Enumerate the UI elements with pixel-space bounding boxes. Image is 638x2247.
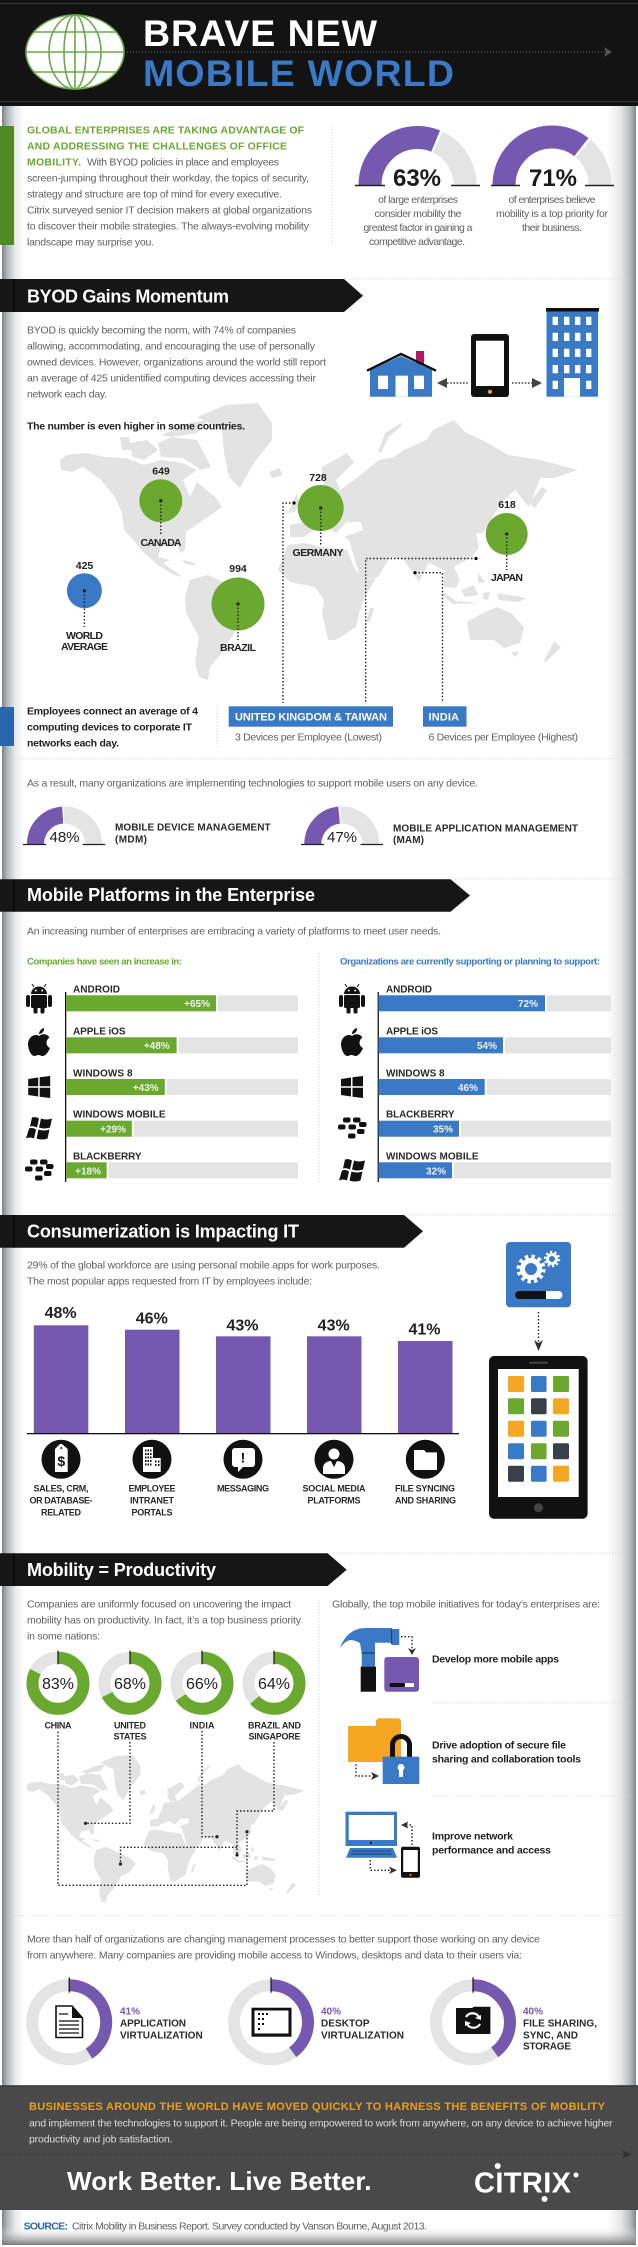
bar chart: popular apps: 43% (318, 1317, 350, 1334)
bar chart: popular apps: MESSAGING (217, 1484, 269, 1494)
donut: desktop virtualization 40%: VIRTUALIZATION (321, 2030, 404, 2042)
gauge: 71%: 71% (529, 165, 577, 192)
bar: windows mobile 32%: 32% (426, 1166, 446, 1177)
text: network performance (432, 1830, 551, 1856)
icon: desktop window (252, 2008, 292, 2037)
heading: mobility productivity: Mobility = Productivity (27, 1560, 216, 1580)
bubble: world average 425: WORLD (66, 630, 103, 642)
icon: office building (132, 1440, 172, 1479)
donut: India 66%: 66% (186, 1676, 218, 1693)
icon: house (367, 351, 436, 397)
intro text: screen-jumping throughout their workday, the topics of security, (27, 172, 309, 184)
panel: intro (0, 124, 614, 248)
bar: windows mobile +29% (26, 1110, 298, 1140)
donut: Brazil and Singapore 64%: 64% (258, 1676, 290, 1693)
icon: sync folder (456, 2007, 490, 2034)
gauge: 71%: mobility is a top priority for (496, 208, 608, 220)
donut: desktop virtualization 40%: DESKTOP (321, 2018, 370, 2030)
bar: windows 8 +43%: +43% (133, 1083, 159, 1094)
gauge: MDM 48% (23, 815, 271, 846)
bar chart: popular apps: AND SHARING (395, 1496, 456, 1506)
BYOD text: allowing, accommodating, and encouraging the use of personally (27, 340, 316, 352)
icon: person (314, 1440, 354, 1479)
icon: document (56, 2006, 82, 2038)
bar chart: popular apps: SALES, CRM, (34, 1484, 88, 1494)
icon: sales tag (42, 1440, 80, 1479)
gauge: MDM 48%: 48% (49, 829, 80, 846)
bubble: world average 425: AVERAGE (61, 641, 108, 653)
donut: file sharing 40% (436, 1977, 597, 2059)
map 2 connector lines (58, 1731, 274, 1885)
callout: devices per employee: networks each day. (27, 738, 119, 750)
gauge: MAM 47%: (MAM) (393, 835, 424, 846)
icon: globe (26, 15, 124, 89)
icon: folder with lock (348, 1718, 419, 1784)
donut: file sharing 40%: 40% (523, 2006, 543, 2018)
gauge: MAM 47%: MOBILE APPLICATION MANAGEMENT (393, 824, 578, 834)
intro text: AND ADDRESSING THE CHALLENGES OF OFFICE (27, 140, 287, 152)
donut: Brazil and Singapore 64%: BRAZIL AND (248, 1720, 302, 1730)
tagline: Work Better. Live Better. (67, 2166, 372, 2196)
donut: application virtualization 41%: APPLICATION (120, 2018, 186, 2030)
text: management processes: More than half of organizations are changing management processes to better support those working on any device (27, 1934, 540, 1946)
intro text: MOBILITY. (27, 156, 81, 168)
gauge: 63% (355, 138, 480, 248)
bar chart: popular apps: RELATED (41, 1508, 82, 1518)
label: India (423, 706, 578, 744)
icon: folder (406, 1440, 445, 1479)
gauge: MDM 48%: MOBILE DEVICE MANAGEMENT (115, 822, 271, 834)
arrow: phone to house (437, 378, 468, 388)
icon: laptop and phone (346, 1812, 420, 1878)
bubble: Brazil 994 (212, 563, 264, 654)
label: UK and Taiwan (229, 706, 393, 744)
bar: windows 8 46%: WINDOWS 8 (386, 1068, 445, 1080)
bar: android 72% (339, 984, 611, 1014)
icon: message bubble: ! (241, 1450, 245, 1466)
arrow: settings to tablet (534, 1312, 543, 1351)
text: consumerization (27, 1260, 380, 1288)
bar: blackberry +18%: BLACKBERRY (73, 1152, 142, 1162)
text: consumerization: 29% of the global workforce are using personal mobile apps for work purposes. (27, 1260, 380, 1272)
bar: android 72%: 72% (518, 999, 538, 1010)
bar: windows mobile +29%: WINDOWS MOBILE (73, 1110, 166, 1120)
panel: top mobile initiatives: Globally, the top mobile initiatives for today’s enterprises are: (332, 1598, 600, 1610)
icon: sales tag: $ (57, 1453, 65, 1469)
bar: android +65%: +65% (184, 999, 210, 1010)
panel: top mobile initiatives (332, 1598, 632, 1878)
intro text: With BYOD policies in place and employees (87, 156, 279, 168)
donut: India 66%: INDIA (190, 1720, 215, 1730)
gauge: 71% (491, 137, 614, 234)
bubble: world average 425 (61, 560, 108, 653)
bar: apple 54%: 54% (477, 1041, 497, 1052)
bar: windows mobile 32%: WINDOWS MOBILE (386, 1152, 479, 1162)
subtitle: MOBILE WORLD (143, 52, 454, 94)
bubble: Germany 728 (292, 472, 344, 559)
donut: Brazil and Singapore 64%: SINGAPORE (248, 1732, 300, 1742)
heading: BYOD (0, 279, 630, 312)
world map 2 (27, 1755, 305, 1903)
bubble: Japan 618: JAPAN (491, 572, 523, 584)
bar chart: popular apps: PORTALS (132, 1508, 172, 1518)
text: secure file sharing (432, 1740, 581, 1766)
BYOD text: network each day. (27, 388, 107, 400)
icon: tablet with apps (489, 1356, 588, 1519)
bubble: Japan 618: 618 (498, 499, 516, 511)
donut: desktop virtualization 40% (234, 1977, 404, 2059)
panel: conclusion band (0, 2085, 638, 2210)
gauge: 71%: of enterprises believe (508, 194, 596, 206)
bubble: Germany 728: 728 (309, 472, 327, 484)
bar chart: popular apps (27, 1305, 459, 1518)
BYOD text: an average of 425 unidentified computing devices accessing their (27, 372, 316, 384)
donut: file sharing 40%: STORAGE (523, 2042, 571, 2052)
text: consumerization: The most popular apps requested from IT by employees include: (27, 1276, 312, 1288)
bar: blackberry 35% (338, 1110, 611, 1138)
gauge: 63%: competitive advantage. (369, 236, 465, 248)
donut: Brazil and Singapore 64% (248, 1651, 302, 1742)
bar: windows 8 46%: 46% (458, 1083, 478, 1094)
heading: BYOD: BYOD Gains Momentum (27, 286, 229, 306)
donut: United States 68%: STATES (114, 1732, 146, 1742)
logo: Citrix: CITRIX (474, 2168, 572, 2200)
text: secure file sharing: sharing and collaboration tools (432, 1754, 581, 1766)
donut: application virtualization 41% (32, 1977, 203, 2059)
bar chart: popular apps: 43% (226, 1317, 259, 1334)
label: India: 6 Devices per Employee (Highest) (428, 732, 578, 744)
gauge: 63%: of large enterprises (378, 194, 458, 206)
bar chart: popular apps: EMPLOYEE (128, 1484, 176, 1494)
bar: apple 54% (341, 1026, 611, 1056)
bar: windows 8 +43%: WINDOWS 8 (73, 1068, 133, 1080)
bar: apple +48%: +48% (144, 1041, 170, 1052)
bar: blackberry 35%: 35% (433, 1125, 453, 1136)
BYOD text: BYOD is quickly becoming the norm, with 74% of companies (27, 324, 296, 336)
source line: Citrix Mobility in Business Report. Survey conducted by Vanson Bourne, August 2013. (72, 2220, 427, 2232)
icon: building (546, 308, 599, 397)
BYOD text: owned devices. However, organizations around the world still report (27, 356, 326, 368)
intro text: Citrix surveyed senior IT decision makers at global organizations (27, 204, 312, 216)
panel: platforms with increase: Companies have seen an increase in: (27, 956, 182, 968)
arrow: phone to building (512, 378, 542, 388)
text: develop apps: Develop more mobile apps (432, 1654, 559, 1666)
text: platforms intro: An increasing number of enterprises are embracing a variety of platforms to meet user needs. (27, 926, 441, 938)
intro text: strategy and structure are top of mind for every executive. (27, 188, 282, 200)
text: network performance: performance and access (432, 1844, 551, 1856)
text: productivity (27, 1598, 302, 1642)
bar chart: popular apps: 48% (45, 1305, 77, 1322)
text: as a result: As a result, many organizations are implementing technologies to support mobile users on any device. (27, 778, 478, 790)
donut: United States 68%: UNITED (114, 1720, 146, 1730)
bubble: Japan 618 (486, 499, 528, 584)
bar: android 72%: ANDROID (386, 984, 432, 996)
bar: blackberry +18%: +18% (75, 1166, 101, 1177)
bar: blackberry 35%: BLACKBERRY (386, 1110, 455, 1120)
bar: apple +48% (28, 1026, 298, 1056)
text: productivity: mobility has on productivity. In fact, it’s a top business priority (27, 1614, 302, 1626)
text: secure file sharing: Drive adoption of secure file (432, 1740, 566, 1752)
text: productivity: in some nations: (27, 1630, 100, 1642)
arrow: header (604, 47, 612, 57)
icon: phone (471, 334, 509, 397)
bar: windows mobile 32% (339, 1152, 611, 1182)
bar: android +65%: ANDROID (73, 984, 120, 996)
map connector lines (283, 501, 478, 703)
donut: application virtualization 41%: 41% (120, 2006, 140, 2018)
icon: message bubble (224, 1440, 262, 1479)
heading: consumerization: Consumerization is Impacting IT (27, 1221, 299, 1241)
text: management processes (27, 1934, 540, 1962)
arrow: footer (622, 2150, 632, 2159)
label: UK and Taiwan: 3 Devices per Employee (Lowest) (235, 732, 382, 744)
icon: settings box (506, 1242, 571, 1307)
bar chart: popular apps: 41% (408, 1321, 441, 1338)
bar: windows mobile +29%: +29% (100, 1125, 126, 1136)
source line: SOURCE: (24, 2220, 68, 2232)
bar chart: popular apps: PLATFORMS (308, 1496, 360, 1506)
heading: mobility productivity (0, 1553, 630, 1586)
gauge: 63%: consider mobility the (374, 208, 462, 220)
text: network performance: Improve network (432, 1830, 513, 1842)
callout: devices per employee: Employees connect an average of 4 (27, 706, 198, 718)
heading: mobile platforms: Mobile Platforms in the Enterprise (27, 885, 315, 905)
bubble: Canada 649: 649 (152, 466, 170, 478)
donut: file sharing 40%: SYNC, AND (523, 2030, 578, 2042)
conclusion text: and implement the technologies to support it. People are being empowered to work from anywhere, on any device to achieve higher (29, 2118, 613, 2130)
label: India: INDIA (428, 712, 459, 724)
icon: hammer and app (340, 1628, 419, 1692)
panel: platforms supported: Organizations are currently supporting or planning to support: (340, 956, 600, 968)
text: productivity: Companies are uniformly focused on uncovering the impact (27, 1598, 291, 1610)
gauge: 63%: greatest factor in gaining a (364, 222, 473, 234)
bar chart: popular apps: 46% (136, 1310, 168, 1327)
bubble: Brazil 994: 994 (229, 563, 247, 575)
bubble: Germany 728: GERMANY (292, 547, 344, 559)
donut: China 83% (32, 1651, 84, 1730)
bar: windows 8 46% (341, 1068, 611, 1098)
bar chart: popular apps: INTRANET (130, 1496, 174, 1506)
conclusion text: BUSINESSES AROUND THE WORLD HAVE MOVED QUICKLY TO HARNESS THE BENEFITS OF MOBILITY (29, 2101, 606, 2113)
sub-heading: countries: The number is even higher in some countries. (27, 420, 245, 432)
header banner (0, 0, 638, 106)
bar chart: popular apps: SOCIAL MEDIA (302, 1484, 366, 1494)
heading: mobile platforms (0, 879, 630, 912)
bubble: Brazil 994: BRAZIL (220, 642, 257, 654)
text: management processes: from anywhere. Many companies are providing mobile access to Windows, desktops and data to their users via: (27, 1950, 522, 1962)
gauge: 63%: 63% (393, 165, 441, 192)
donut: desktop virtualization 40%: 40% (321, 2006, 341, 2018)
intro text: GLOBAL ENTERPRISES ARE TAKING ADVANTAGE OF (27, 124, 305, 136)
intro text: to discover their mobile strategies. The always-evolving mobility (27, 220, 310, 232)
donut: file sharing 40%: FILE SHARING, (523, 2018, 597, 2030)
conclusion text: productivity and job satisfaction. (29, 2134, 173, 2146)
intro text (27, 124, 312, 248)
donut: United States 68% (104, 1651, 156, 1742)
bar: apple +48%: APPLE iOS (73, 1026, 126, 1038)
heading: consumerization (0, 1215, 630, 1248)
panel: platforms supported (338, 956, 611, 1182)
gauge: MAM 47% (301, 815, 578, 846)
bubble: Canada 649: CANADA (140, 537, 182, 549)
donut: China 83%: CHINA (44, 1720, 72, 1730)
bar chart: popular apps: OR DATABASE- (30, 1496, 92, 1506)
world map 1 (60, 403, 578, 680)
bubble: world average 425: 425 (76, 560, 93, 572)
gauge: MDM 48%: (MDM) (115, 834, 147, 846)
donut: United States 68%: 68% (114, 1676, 146, 1693)
gauge: MAM 47%: 47% (327, 829, 357, 846)
panel: platforms with increase (25, 956, 298, 1182)
bar: android +65% (26, 984, 298, 1014)
bar: blackberry +18% (25, 1152, 298, 1180)
bubble: Canada 649 (139, 466, 182, 549)
callout: devices per employee: computing devices to corporate IT (27, 722, 193, 734)
donut: application virtualization 41%: VIRTUALIZATION (120, 2030, 203, 2042)
BYOD text (27, 324, 326, 400)
donut: India 66% (176, 1651, 228, 1730)
bar: windows 8 +43% (28, 1068, 298, 1098)
gauge: 71%: their business. (522, 222, 582, 234)
label: UK and Taiwan: UNITED KINGDOM & TAIWAN (235, 712, 387, 724)
bar chart: popular apps: FILE SYNCING (395, 1484, 455, 1494)
intro text: landscape may surprise you. (27, 236, 154, 248)
title: BRAVE NEW (143, 12, 378, 54)
conclusion text (29, 2101, 613, 2146)
donut: China 83%: 83% (42, 1676, 74, 1693)
callout: devices per employee (0, 706, 198, 750)
bar: apple 54%: APPLE iOS (386, 1026, 438, 1038)
